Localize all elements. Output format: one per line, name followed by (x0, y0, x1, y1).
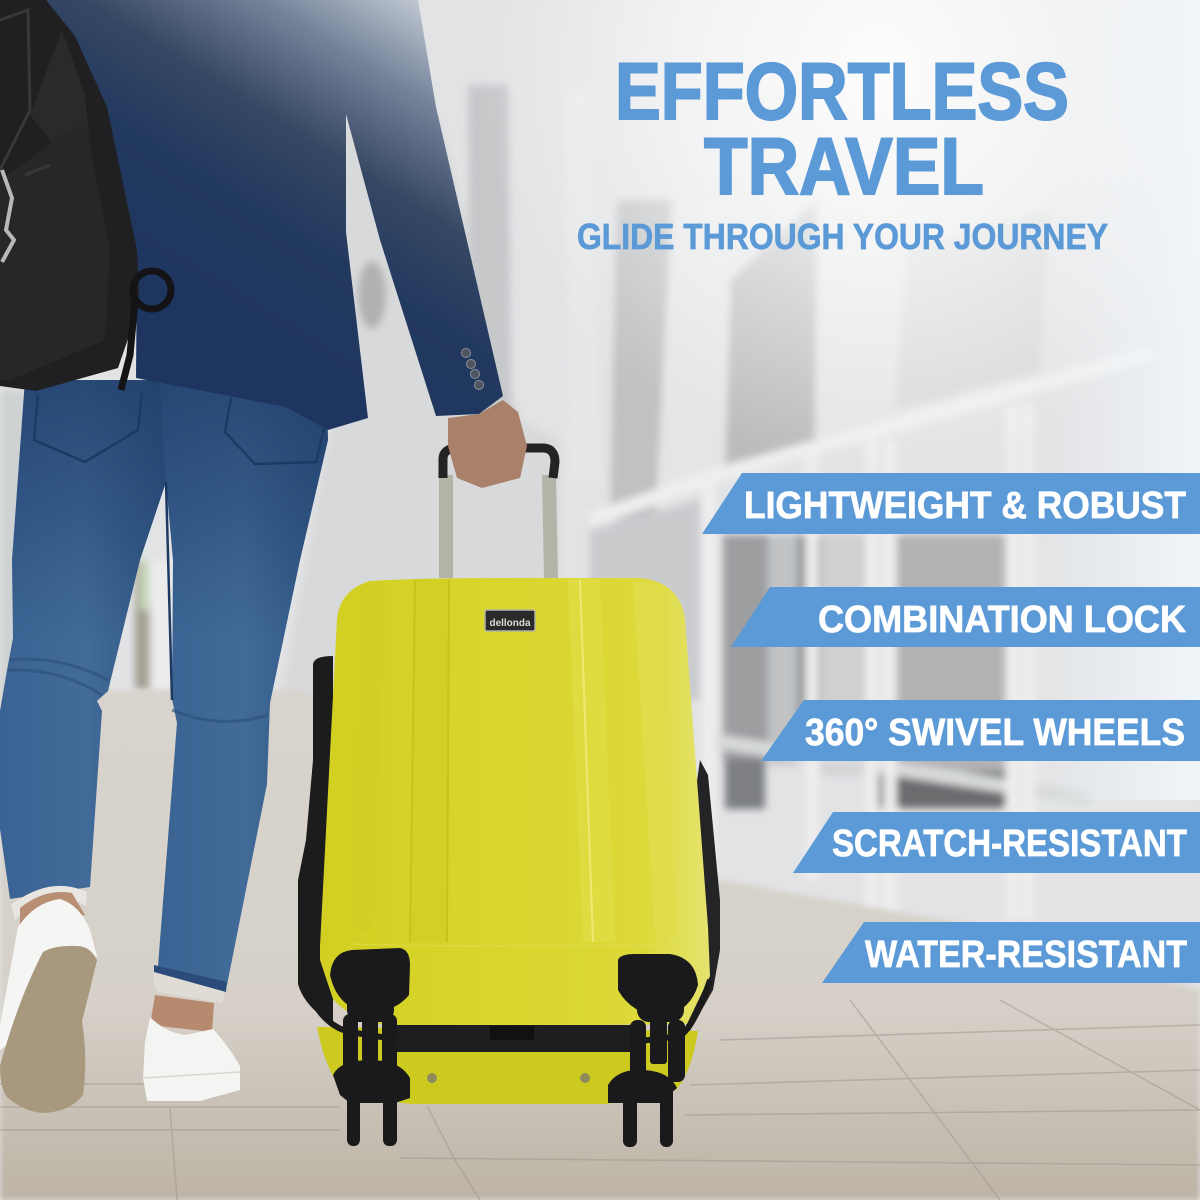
wheel: right (608, 954, 698, 1147)
banner: lightweight and robust (702, 473, 1200, 534)
title: TRAVEL (704, 122, 984, 212)
subtitle: GLIDE THROUGH YOUR JOURNEY (577, 216, 1108, 257)
rivets (427, 1073, 590, 1083)
back shell (298, 656, 343, 1030)
banner: combination lock: COMBINATION LOCK (818, 599, 1187, 641)
backpack (0, 0, 171, 391)
left ankle (20, 892, 85, 925)
telescopic handle (443, 448, 555, 578)
left shoe (0, 899, 97, 1113)
title (615, 47, 1069, 212)
main shell (320, 578, 710, 1027)
banner: swivel wheels (761, 700, 1200, 761)
zipper pull (2, 170, 14, 262)
right ankle (150, 995, 214, 1032)
right shoe (143, 1017, 240, 1101)
shell ribs (352, 579, 683, 946)
hand gripping handle (448, 400, 527, 488)
wheel: left (330, 948, 410, 1146)
man walking (0, 0, 503, 1113)
jeans (0, 380, 328, 1003)
lower shell (317, 1027, 698, 1104)
glow overlay (0, 0, 1200, 700)
brand badge: dellonda (490, 618, 531, 629)
floor (0, 690, 1200, 1200)
brand badge (485, 610, 535, 631)
strap loop (121, 271, 171, 390)
jacket (45, 0, 503, 430)
title: EFFORTLESS (615, 47, 1069, 137)
banner: scratch-resistant (793, 812, 1200, 873)
window panels and railing (0, 85, 1200, 920)
banner: water-resistant (822, 922, 1200, 983)
banner: combination lock (731, 587, 1200, 647)
suitcase (298, 400, 720, 1147)
zipper band (306, 980, 710, 1052)
cuff buttons (462, 348, 484, 390)
